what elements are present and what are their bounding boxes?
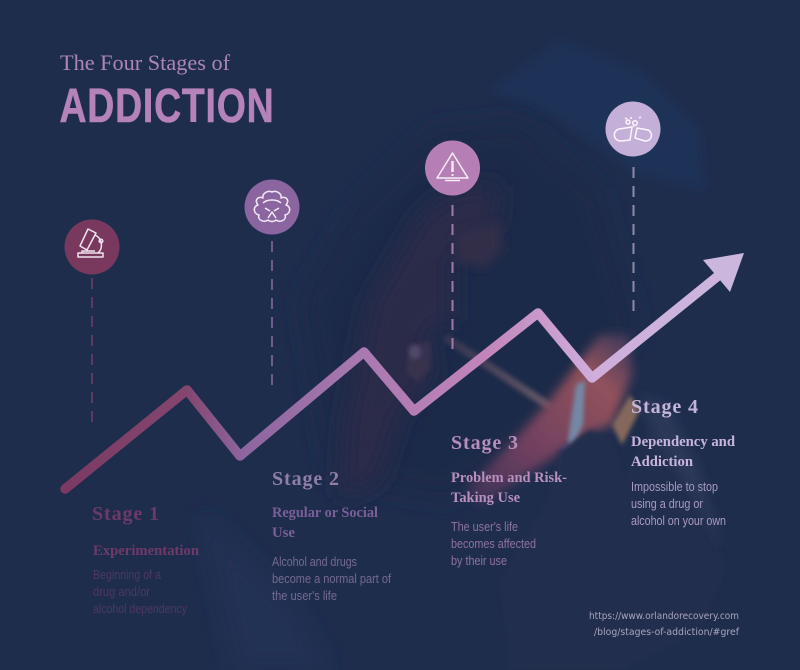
stage 1 body bbox=[93, 567, 187, 616]
stage 3 body: becomes affected bbox=[451, 536, 536, 551]
stage 3 subtitle: Taking Use bbox=[451, 490, 521, 506]
stage 4 body: alcohol on your own bbox=[631, 513, 726, 528]
icon: microscope bbox=[64, 220, 120, 274]
stage 4 heading: Stage 4 bbox=[631, 396, 698, 418]
stage 2 subtitle: Use bbox=[272, 525, 296, 541]
dashed connectors bbox=[92, 167, 634, 430]
stage 2 subtitle: Regular or Social bbox=[272, 505, 378, 521]
subtitle: The Four Stages of bbox=[60, 50, 231, 75]
stage 4 body: Impossible to stop bbox=[631, 479, 718, 494]
stage 3 text bbox=[451, 432, 567, 568]
stage 2 body bbox=[272, 554, 391, 603]
stage 2 heading: Stage 2 bbox=[272, 468, 339, 490]
stage 4 subtitle: Addiction bbox=[631, 454, 693, 470]
stage 2 body: Alcohol and drugs bbox=[272, 554, 357, 569]
stage 1 heading: Stage 1 bbox=[92, 503, 159, 525]
source url: https://www.orlandorecovery.com bbox=[589, 611, 739, 622]
icon: warning bbox=[425, 140, 480, 196]
stage 3 subtitle: Problem and Risk- bbox=[451, 470, 567, 486]
source url: /blog/stages-of-addiction/#gref bbox=[594, 627, 740, 638]
background photo: person lighting a cigarette bbox=[200, 40, 725, 670]
stage 4 body bbox=[631, 479, 726, 528]
connector 4 bbox=[632, 167, 634, 319]
icon: broken pill bbox=[606, 102, 660, 156]
stage 1 body: alcohol dependency bbox=[93, 601, 187, 616]
icon: brain bbox=[244, 180, 300, 234]
connector 2 bbox=[271, 241, 273, 392]
stage 1 subtitle: Experimentation bbox=[93, 543, 199, 559]
stage 2 body: become a normal part of bbox=[272, 571, 391, 586]
title bbox=[60, 50, 274, 133]
stage 1 body: Beginning of a bbox=[93, 567, 162, 582]
source url bbox=[589, 611, 740, 638]
rising arrow line bbox=[65, 253, 744, 489]
stage 3 body bbox=[451, 519, 536, 568]
stage 1 body: drug and/or bbox=[93, 584, 151, 599]
main heading: ADDICTION bbox=[60, 80, 274, 133]
stage 4 subtitle: Dependency and bbox=[631, 434, 735, 450]
arrowhead bbox=[703, 253, 744, 292]
stage 3 body: The user's life bbox=[451, 519, 518, 534]
stage 2 text bbox=[272, 468, 391, 603]
stage 2 body: the user's life bbox=[272, 588, 337, 603]
stage 4 body: using a drug or bbox=[631, 496, 704, 511]
stage 1 text bbox=[92, 503, 199, 616]
stage 4 text bbox=[631, 396, 735, 528]
stage 2 subtitle bbox=[272, 505, 378, 541]
connector 1 bbox=[91, 278, 93, 430]
stage 4 subtitle bbox=[631, 434, 735, 470]
connector 3 bbox=[452, 205, 454, 356]
stage 3 heading: Stage 3 bbox=[451, 432, 518, 454]
stage 3 subtitle bbox=[451, 470, 567, 506]
stage 3 body: by their use bbox=[451, 553, 507, 568]
